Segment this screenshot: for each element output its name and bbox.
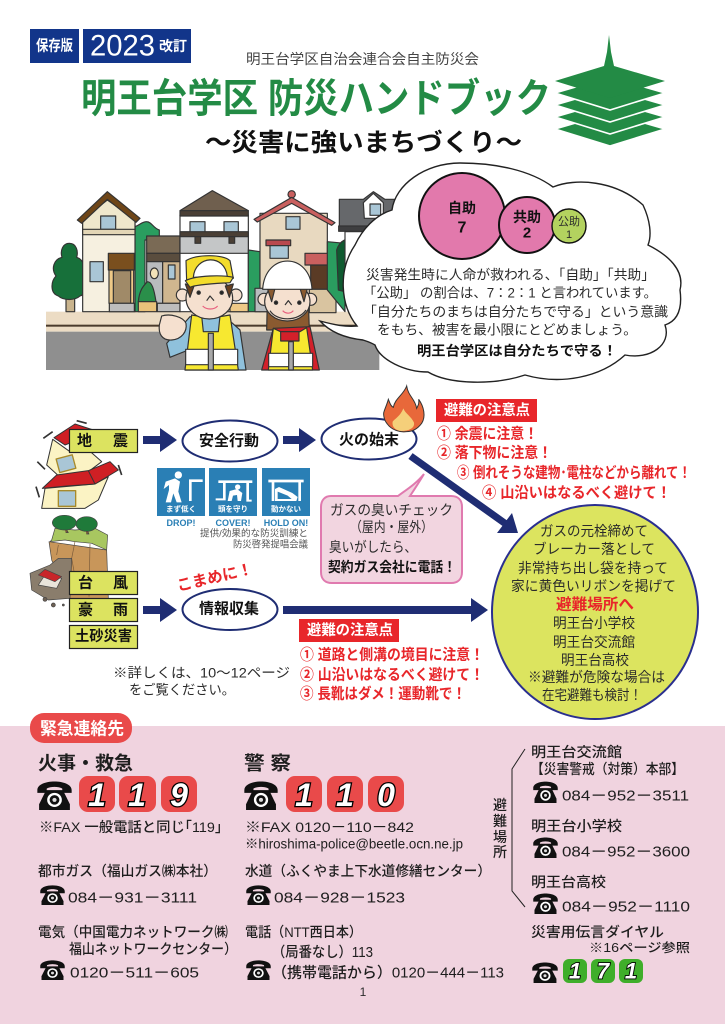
contact: Myoodai exchange hall: 明王台交流館 bbox=[531, 744, 622, 760]
background: emergency contact area bbox=[0, 726, 725, 1024]
contact: fire and ambulance 119: 1 bbox=[88, 777, 106, 813]
contact: city gas: 都市ガス（福山ガス㈱本社） bbox=[38, 863, 217, 879]
panel: evacuation circle: 家に黄色いリボンを掲げて bbox=[511, 578, 676, 594]
circle: self help 7: 自助 bbox=[448, 200, 476, 216]
contact: police 110 bbox=[244, 752, 463, 852]
panel: evacuation circle: 在宅避難も検討！ bbox=[542, 687, 642, 703]
contact: disaster message dial 171: 災害用伝言ダイヤル bbox=[531, 924, 664, 940]
vertical label: evacuation sites: 所 bbox=[493, 844, 507, 860]
panel: evacuation circle: 明王台交流館 bbox=[553, 634, 635, 650]
house one bbox=[77, 192, 140, 312]
contact: elementary school: 明王台小学校 bbox=[531, 818, 622, 834]
credit text bbox=[200, 528, 308, 550]
arrow: safety action to fire control bbox=[283, 428, 316, 452]
green hedge back bbox=[135, 222, 159, 312]
pictogram: cover bbox=[209, 468, 257, 528]
heading box bbox=[436, 399, 537, 422]
pictogram: cover: 頭を守り bbox=[218, 504, 248, 514]
contact: water bbox=[245, 863, 491, 906]
contact: high school bbox=[531, 874, 690, 916]
contact: Myoodai exchange hall bbox=[531, 744, 689, 804]
pictogram: hold on bbox=[262, 468, 310, 528]
badge: emergency contacts: 緊急連絡先 bbox=[40, 718, 124, 738]
text: explanation in cloud: 災害発生時に人命が救われる、「自助」「共助」 bbox=[366, 268, 655, 282]
labels: typhoon, heavy rain, landslide: 豪 雨 bbox=[78, 600, 128, 618]
chart: self-help ratio circles bbox=[419, 173, 586, 259]
contact: police 110: 1 bbox=[295, 777, 313, 813]
contact: electricity bbox=[38, 924, 237, 982]
badge: emergency contacts bbox=[30, 713, 132, 743]
panel: evacuation circle: 明王台高校 bbox=[561, 652, 629, 668]
contact: police 110: 0 bbox=[377, 777, 395, 813]
oval: information gathering: 情報収集 bbox=[199, 600, 259, 618]
vertical label: evacuation sites: 場 bbox=[493, 829, 507, 845]
contact: water: 084－928－1523 bbox=[274, 890, 405, 906]
callout: gas smell check bbox=[321, 474, 462, 583]
pictogram: drop bbox=[157, 468, 205, 528]
house two bbox=[138, 236, 180, 312]
contact: telephone company: 電話（NTT西日本） bbox=[245, 924, 362, 940]
badge: 2023 revision: 改訂 bbox=[159, 38, 187, 54]
heading box: 避難の注意点 bbox=[307, 621, 393, 639]
contact: high school: 084－952－1110 bbox=[562, 898, 690, 916]
tree bbox=[52, 243, 87, 312]
house three bbox=[180, 191, 248, 312]
contact: disaster message dial 171 bbox=[531, 924, 690, 984]
vertical label: evacuation sites: 避 bbox=[493, 797, 507, 813]
main title: 明王台学区 防災ハンドブック bbox=[81, 77, 551, 121]
icon: telephone bbox=[37, 782, 72, 810]
circle: mutual help 2: 2 bbox=[523, 224, 531, 242]
panel: evacuation cautions one: ① 余震に注意！ bbox=[437, 424, 538, 442]
oval: safety action bbox=[182, 420, 278, 462]
note: see pages 10-12 bbox=[113, 666, 290, 698]
dark tree bbox=[337, 239, 352, 293]
contact: electricity: 0120－511－605 bbox=[70, 964, 199, 982]
pictogram: drop: まず低く bbox=[166, 504, 196, 514]
speech cloud bbox=[320, 163, 681, 382]
icon: flame bbox=[384, 386, 424, 432]
panel: evacuation cautions two: ② 山沿いはなるべく避けて！ bbox=[300, 666, 484, 684]
panel: evacuation cautions one: ④ 山沿いはなるべく避けて！ bbox=[482, 484, 671, 502]
panel: evacuation cautions one bbox=[436, 399, 691, 502]
text: explanation in cloud bbox=[363, 268, 669, 358]
contact: fire and ambulance 119: 火事・救急 bbox=[38, 752, 133, 774]
circle: self help 7 bbox=[419, 173, 505, 259]
oval: fire control bbox=[322, 418, 416, 460]
callout: gas smell check: 臭いがしたら、 bbox=[329, 539, 417, 555]
contact: disaster message dial 171: 1 bbox=[625, 958, 637, 984]
panel: evacuation circle: ※避難が危険な場合は bbox=[528, 669, 665, 685]
green hedge middle bbox=[248, 250, 260, 312]
pictogram: drop: DROP! bbox=[166, 518, 196, 528]
contact: police 110: ※hiroshima-police@beetle.ocn.ne.jp bbox=[245, 836, 463, 852]
heading box bbox=[299, 619, 399, 642]
text: explanation in cloud: をもち、被害を最小限にとどめましょう。 bbox=[377, 322, 637, 338]
heading box: 避難の注意点 bbox=[444, 401, 530, 419]
bracket bbox=[512, 749, 525, 907]
panel: evacuation cautions one: ② 落下物に注意！ bbox=[437, 444, 552, 462]
callout: gas smell check: 契約ガス会社に電話！ bbox=[328, 559, 456, 575]
contact: Myoodai exchange hall: 【災害警戒（対策）本部】 bbox=[531, 761, 684, 777]
panel: evacuation circle bbox=[492, 505, 698, 719]
contact: electricity: 電気（中国電力ネットワーク㈱ bbox=[38, 924, 228, 940]
oval: information gathering bbox=[182, 589, 278, 630]
text: explanation in cloud: 「公助」 の割合は、7：2：1 と言われています。 bbox=[363, 286, 657, 300]
circle: mutual help 2: 共助 bbox=[513, 209, 541, 225]
panel: evacuation cautions two: ③ 長靴はダメ！運動靴で！ bbox=[300, 684, 466, 702]
credit text: 防災啓発提唱会議 bbox=[233, 538, 308, 550]
contact: fire and ambulance 119: ※FAX 一般電話と同じ｢119｣ bbox=[39, 819, 222, 835]
contact: telephone company: （局番なし）113 bbox=[272, 944, 373, 961]
contact: fire and ambulance 119: 9 bbox=[170, 777, 188, 813]
labels: typhoon, heavy rain, landslide bbox=[70, 572, 138, 648]
subtitle: ～災害に強いまちづくり～ bbox=[205, 129, 522, 157]
labels: typhoon, heavy rain, landslide: 台 風 bbox=[78, 574, 128, 592]
contact: disaster message dial 171: 1 bbox=[569, 958, 581, 984]
pictogram: hold on: 動かない bbox=[271, 504, 301, 514]
arrow: earthquake to safety action bbox=[143, 428, 177, 452]
circle: public help 1: 1 bbox=[566, 229, 572, 241]
callout: gas smell check: ガスの臭いチェック bbox=[330, 502, 453, 518]
circle: public help 1: 公助 bbox=[558, 214, 580, 228]
label: earthquake bbox=[70, 430, 138, 452]
panel: evacuation circle: 明王台小学校 bbox=[553, 615, 635, 631]
contact: city gas bbox=[38, 863, 217, 906]
credit text: 提供/効果的な防災訓練と bbox=[200, 528, 308, 540]
panel: evacuation circle: ブレーカー落として bbox=[533, 541, 655, 557]
arrow: fire control to evacuation bbox=[408, 453, 518, 533]
badge: keep edition bbox=[30, 29, 79, 63]
contact: elementary school bbox=[531, 818, 690, 860]
contact: telephone company: （携帯電話から）0120－444－113 bbox=[272, 964, 504, 982]
label: earthquake: 地 震 bbox=[77, 432, 128, 450]
contact: telephone company bbox=[245, 924, 504, 982]
circle: mutual help 2 bbox=[499, 197, 555, 253]
note: see pages 10-12: ※詳しくは、10～12ページ bbox=[113, 666, 290, 680]
illustration: neighbourhood with two residents bbox=[46, 191, 397, 370]
badge: 2023 revision: 2023 bbox=[90, 30, 155, 62]
arrow: disaster to information gathering bbox=[143, 598, 177, 622]
contact: elementary school: 084－952－3600 bbox=[562, 844, 690, 860]
green hedge right bbox=[327, 242, 345, 312]
contact: high school: 明王台高校 bbox=[531, 874, 606, 890]
arrow: information to evacuation bbox=[283, 598, 488, 622]
panel: evacuation cautions two bbox=[299, 619, 484, 702]
panel: evacuation circle: ガスの元栓締めて bbox=[540, 523, 648, 539]
panel: evacuation circle: 非常持ち出し袋を持って bbox=[518, 560, 668, 576]
pictogram: hold on: HOLD ON! bbox=[264, 518, 308, 528]
contact: fire and ambulance 119: 1 bbox=[128, 777, 146, 813]
panel: evacuation circle: 避難場所へ bbox=[556, 596, 634, 614]
contact: police 110: ※FAX 0120－110－842 bbox=[245, 819, 414, 835]
contact: disaster message dial 171: ※16ページ参照 bbox=[589, 940, 690, 955]
pictogram: cover: COVER! bbox=[215, 518, 251, 528]
sidewalk and road bbox=[46, 312, 379, 370]
contact: Myoodai exchange hall: 084－952－3511 bbox=[562, 788, 689, 804]
person: man in cap bbox=[159, 256, 246, 370]
contact: police 110: 警 察 bbox=[244, 752, 291, 774]
house five bbox=[339, 192, 397, 265]
oval: fire control: 火の始末 bbox=[339, 430, 399, 448]
note: see pages 10-12: をご覧ください。 bbox=[129, 682, 235, 698]
house four bbox=[254, 191, 336, 313]
contact: police 110: 1 bbox=[336, 777, 354, 813]
person: woman in helmet bbox=[258, 261, 319, 370]
vertical label: evacuation sites bbox=[493, 797, 507, 860]
oval: safety action: 安全行動 bbox=[199, 432, 259, 450]
handwritten note: こまめに！ bbox=[175, 560, 255, 595]
badge: 2023 revision bbox=[83, 29, 191, 63]
vertical label: evacuation sites: 難 bbox=[493, 813, 507, 829]
text: explanation in cloud: 明王台学区は自分たちで守る！ bbox=[417, 342, 617, 358]
icon: green pagoda logo bbox=[555, 35, 665, 146]
panel: evacuation cautions two: ① 道路と側溝の境目に注意！ bbox=[300, 646, 484, 664]
illustration: collapsing house bbox=[36, 421, 122, 508]
contact: electricity: 福山ネットワークセンター） bbox=[69, 941, 237, 957]
icon: telephone bbox=[244, 782, 278, 810]
contact: city gas: 084－931－3111 bbox=[68, 890, 197, 906]
page number: 1 bbox=[360, 985, 367, 999]
contact: disaster message dial 171: 7 bbox=[597, 958, 611, 984]
organisation name: 明王台学区自治会連合会自主防災会 bbox=[246, 51, 479, 67]
contact: water: 水道（ふくやま上下水道修繕センター） bbox=[245, 863, 491, 879]
circle: self help 7: 7 bbox=[458, 220, 467, 236]
text: explanation in cloud: 「自分たちのまちは自分たちで守る」という意識 bbox=[363, 304, 669, 320]
callout: gas smell check: （屋内・屋外） bbox=[350, 519, 433, 535]
circle: public help 1 bbox=[552, 209, 586, 243]
labels: typhoon, heavy rain, landslide: 土砂災害 bbox=[75, 628, 132, 645]
badge: keep edition: 保存版 bbox=[36, 36, 73, 54]
illustration: landslide bbox=[30, 515, 108, 607]
contact: fire and ambulance 119 bbox=[37, 752, 222, 835]
